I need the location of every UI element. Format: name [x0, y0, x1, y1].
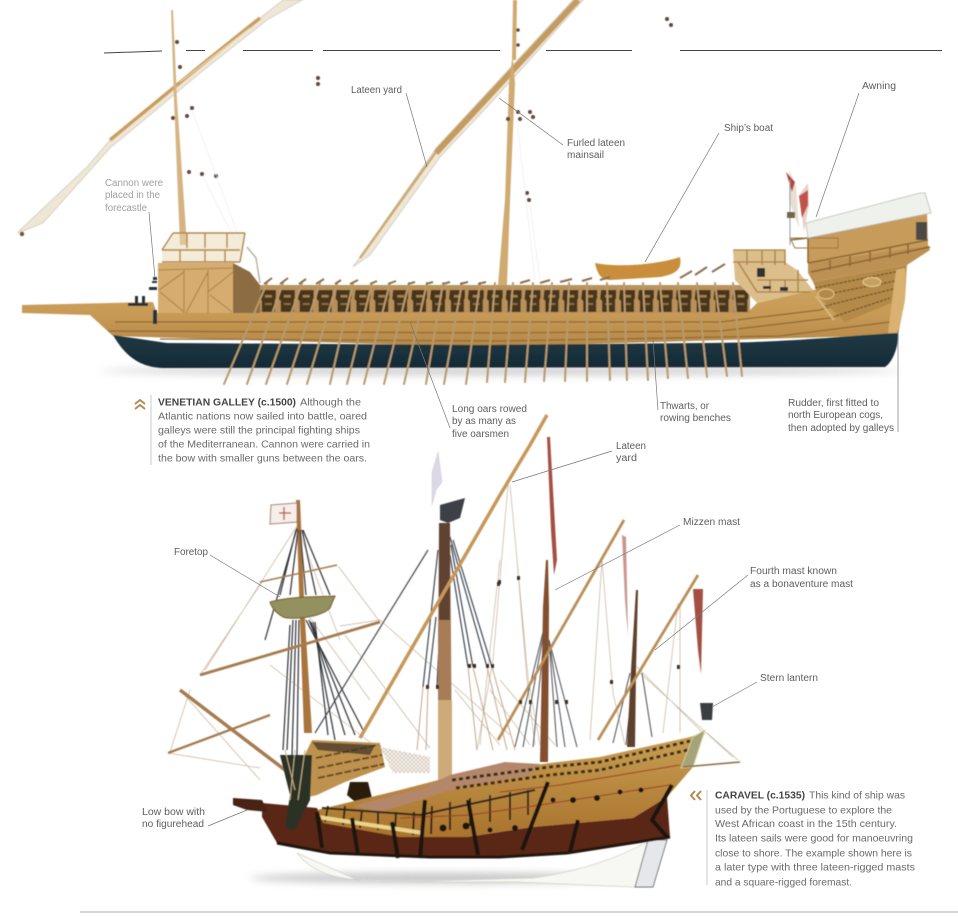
oars: [224, 283, 742, 384]
main lateen yard: [360, 415, 547, 738]
icon: galley chevrons: [135, 400, 145, 409]
cream stripe: [318, 817, 423, 833]
label: fourth mast: [655, 566, 853, 650]
bonaventure shrouds: [613, 670, 652, 745]
stern deck: [733, 250, 813, 303]
oar handles: [264, 264, 725, 284]
fore mast: [296, 500, 312, 733]
awning: [806, 193, 931, 238]
net: [380, 747, 430, 773]
top horizon rule: [104, 50, 942, 53]
caption: caravel: used by the Portuguese to explore the: [715, 806, 892, 816]
bow cannon: [128, 277, 157, 324]
label: lateen yard: Lateen yard: [351, 85, 402, 96]
stern lantern: [700, 703, 713, 720]
main lateen yard and sail: [353, 0, 583, 267]
main shrouds: [423, 537, 492, 687]
long stay: [315, 550, 428, 733]
gunports: [440, 788, 644, 832]
caption: venetian galley: Although the: [300, 398, 361, 408]
hull ribs: [317, 782, 672, 858]
main mast: [498, 0, 517, 285]
label: stern lantern: Stern lantern: [760, 673, 818, 684]
stern carving: [813, 265, 907, 322]
label: cannon: forecastle: [105, 203, 147, 214]
fore lateen yard and sail: [18, 0, 302, 236]
stern rudder: [635, 840, 667, 887]
label: ship's boat: [645, 123, 773, 262]
caption: caravel: [707, 790, 915, 888]
ship's boat: [595, 257, 680, 280]
caption: caravel: and a square-rigged foremast.: [715, 878, 852, 888]
caption: venetian galley: [151, 395, 370, 465]
caption: caravel: a later type with three lateen-rigged masts: [715, 862, 915, 874]
label: rudder: north European cogs,: [788, 410, 883, 421]
label: mizzen mast: Mizzen mast: [683, 517, 740, 528]
stern cabin: [790, 212, 930, 282]
label: low bow: Low bow with: [142, 807, 205, 818]
dark wale: [262, 797, 670, 857]
label: cannon: placed in the: [105, 190, 160, 201]
rowing benches: [240, 288, 750, 313]
rudder: [888, 268, 905, 333]
rigging blocks: [426, 576, 680, 704]
caption: caravel: close to shore. The example shown here is: [715, 848, 912, 860]
mizzen mast: [540, 560, 549, 762]
rigging lines: [192, 110, 540, 280]
label: furled lateen mainsail: [499, 98, 625, 161]
label: caravel lateen yard: yard: [616, 453, 637, 464]
label: stern lantern: [712, 673, 818, 707]
caption: venetian galley: of the Mediterranean. Cannon were carried in: [158, 440, 370, 450]
foretop: [270, 596, 335, 618]
forecastle: [158, 233, 260, 313]
label: cannon: Cannon were: [105, 178, 163, 189]
caption: caravel: West African coast in the 15th century.: [715, 819, 897, 830]
pennants: [547, 437, 703, 674]
foremast flag: [270, 503, 297, 524]
galley shadow: [100, 367, 900, 375]
stern boom: [683, 762, 740, 767]
stern panel: [681, 730, 705, 768]
bonaventure yard: [598, 575, 698, 740]
rigging fine lines: [168, 485, 738, 780]
caption: venetian galley: Atlantic nations now sailed into battle, oared: [158, 412, 367, 422]
label: low bow: [142, 807, 247, 830]
label: fourth mast: as a bonaventure mast: [750, 579, 853, 590]
label: cannon: [105, 178, 163, 278]
hull planks lines: [108, 285, 895, 341]
caption: caravel: CARAVEL (c.1535): [715, 790, 805, 802]
hanging rigging blocks: [171, 17, 673, 202]
main hull wood: [317, 732, 704, 837]
label: long oars: [410, 322, 527, 440]
lower main shrouds: [417, 667, 515, 750]
deck rail: [240, 285, 745, 288]
label: ship's boat: Ship’s boat: [724, 123, 773, 134]
label: thwarts: [653, 340, 731, 424]
label: rudder: then adopted by galleys: [788, 423, 894, 434]
caption: venetian galley: VENETIAN GALLEY (c.1500): [158, 398, 296, 408]
main top: [440, 498, 465, 523]
label: caravel lateen yard: Lateen: [616, 441, 646, 452]
caravel shadow: [250, 873, 630, 883]
label: furled lateen mainsail: mainsail: [567, 150, 604, 161]
label: foretop: Foretop: [174, 547, 208, 558]
label: long oars: Long oars rowed: [452, 404, 527, 415]
caravel ship: [168, 415, 740, 887]
main mast: [438, 523, 452, 780]
label: rudder: Rudder, first fitted to: [788, 398, 879, 409]
hull red stripes: [400, 765, 680, 818]
bonaventure mast: [627, 590, 638, 747]
label: mizzen mast: [555, 517, 740, 590]
mizzen yard: [498, 520, 624, 740]
bottom rule: [80, 911, 958, 913]
waist rail structure: [322, 790, 535, 835]
bow rigging cluster: [280, 755, 312, 830]
bow beak: [233, 798, 268, 812]
forecastle caravel: [296, 740, 385, 800]
fore shrouds: [265, 528, 363, 755]
label: awning: Awning: [862, 81, 896, 92]
white underhull: [297, 840, 667, 887]
main flag: [432, 452, 442, 505]
hull planking: [22, 265, 907, 347]
galley ship: [18, 0, 931, 384]
caption: caravel: This kind of ship was: [809, 790, 905, 802]
dark lower hull: [113, 333, 898, 368]
label: awning: [816, 81, 896, 217]
label: foretop: [174, 547, 280, 597]
label: thwarts: Thwarts, or: [660, 401, 710, 412]
label: thwarts: rowing benches: [660, 413, 731, 424]
fore yards: [168, 565, 380, 770]
label: caravel lateen yard: [512, 441, 646, 482]
mizzen shrouds: [515, 620, 577, 747]
label: furled lateen mainsail: Furled lateen: [567, 138, 625, 149]
stern flags: [786, 170, 809, 245]
caption: venetian galley: the bow with smaller guns between the oars.: [158, 454, 367, 464]
label: fourth mast: Fourth mast known: [750, 566, 837, 577]
fore mast: [171, 10, 187, 245]
label: long oars: five oarsmen: [452, 429, 509, 440]
bulwark works: [452, 741, 690, 788]
caption: caravel: Its lateen sails were good for manoeuvring: [715, 834, 913, 844]
waist deck: [353, 762, 540, 812]
label: long oars: by as many as: [452, 416, 516, 427]
icon: caravel chevrons: [691, 791, 701, 800]
caption: venetian galley: galleys were still the principal fighting ships: [158, 426, 360, 436]
label: low bow: no figurehead: [142, 819, 204, 830]
label: lateen yard: [351, 85, 427, 167]
label: rudder: [788, 330, 898, 434]
